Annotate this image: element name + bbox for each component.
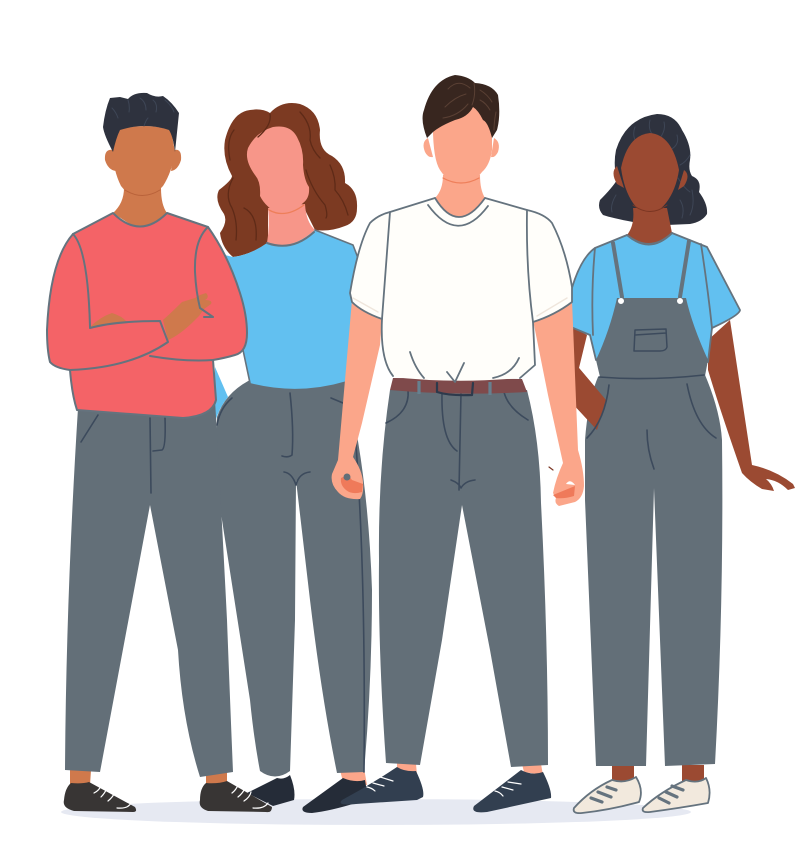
person: man in red sweater with crossed arms <box>47 93 272 812</box>
face <box>247 126 309 214</box>
face <box>113 126 175 198</box>
shoes <box>341 767 551 812</box>
trouser seams <box>386 390 528 490</box>
shirt <box>225 230 358 389</box>
ankles <box>70 770 227 785</box>
chin line <box>269 205 304 214</box>
crossed hand <box>163 293 211 340</box>
neck <box>435 175 485 217</box>
shirt <box>565 233 740 362</box>
hair strands <box>612 120 693 218</box>
trousers <box>216 378 372 776</box>
shoes <box>247 775 294 806</box>
pocket hand <box>572 368 606 430</box>
bib pocket <box>634 329 667 351</box>
ears <box>105 150 181 171</box>
right arm and hand <box>533 300 584 506</box>
trouser seams <box>81 415 165 493</box>
neckline <box>627 233 672 244</box>
neck <box>113 188 167 232</box>
right hand fingers <box>553 486 575 498</box>
hair strands <box>443 83 496 130</box>
neckline <box>267 232 314 246</box>
shoe laces <box>367 777 521 796</box>
shirt outline <box>350 198 572 382</box>
ears <box>614 166 688 190</box>
neck <box>267 204 315 246</box>
blue shirt sliver behind arm <box>215 367 228 422</box>
t-shirt <box>350 198 572 381</box>
hair <box>423 75 499 138</box>
straps <box>613 241 689 297</box>
neck <box>627 208 672 244</box>
trousers <box>379 390 548 767</box>
shoe laces <box>591 786 683 803</box>
chin line <box>125 190 160 196</box>
collar <box>428 198 488 226</box>
right hand gap <box>566 481 575 485</box>
hair <box>103 93 179 152</box>
left hand thumb shadow <box>344 474 350 480</box>
hair strands <box>112 98 174 126</box>
hair strands <box>228 112 348 240</box>
finger tick <box>549 467 553 470</box>
belt loops <box>419 381 490 395</box>
chin line <box>633 205 667 212</box>
belt buckle <box>437 383 473 395</box>
buttons <box>621 298 680 304</box>
belt <box>390 378 527 394</box>
sleeve seams and forearm <box>70 227 213 370</box>
right arm and hand <box>708 320 795 491</box>
sleeve seams <box>592 244 712 335</box>
hair <box>599 114 707 225</box>
trousers <box>65 400 233 777</box>
face <box>621 133 679 213</box>
bib waist line <box>599 375 704 379</box>
person: woman in blue shirt and overalls <box>565 114 795 813</box>
sleeve hem shading <box>353 298 567 316</box>
person: tall man in white t-shirt <box>332 75 584 812</box>
far hand <box>90 313 127 327</box>
face <box>433 100 492 185</box>
person: woman with wavy brown hair <box>215 103 372 813</box>
shirt outline <box>243 230 358 383</box>
ankles <box>397 762 543 775</box>
left arm and hand <box>332 300 382 499</box>
ankles <box>612 765 704 783</box>
overalls bib <box>596 298 708 379</box>
chin line <box>443 178 479 183</box>
left hand fingers <box>341 476 363 493</box>
shoes <box>64 781 272 812</box>
shoe laces <box>94 785 268 808</box>
overalls seams <box>587 384 716 469</box>
shoes <box>574 777 710 813</box>
trouser seams <box>217 393 364 772</box>
sweater <box>47 213 247 418</box>
hair back <box>217 103 357 257</box>
overalls trousers <box>585 375 722 766</box>
ground shadow <box>61 799 691 825</box>
shoe right <box>302 778 368 813</box>
ears <box>424 138 499 157</box>
left arm in pocket <box>565 322 606 430</box>
ankle <box>340 768 367 785</box>
